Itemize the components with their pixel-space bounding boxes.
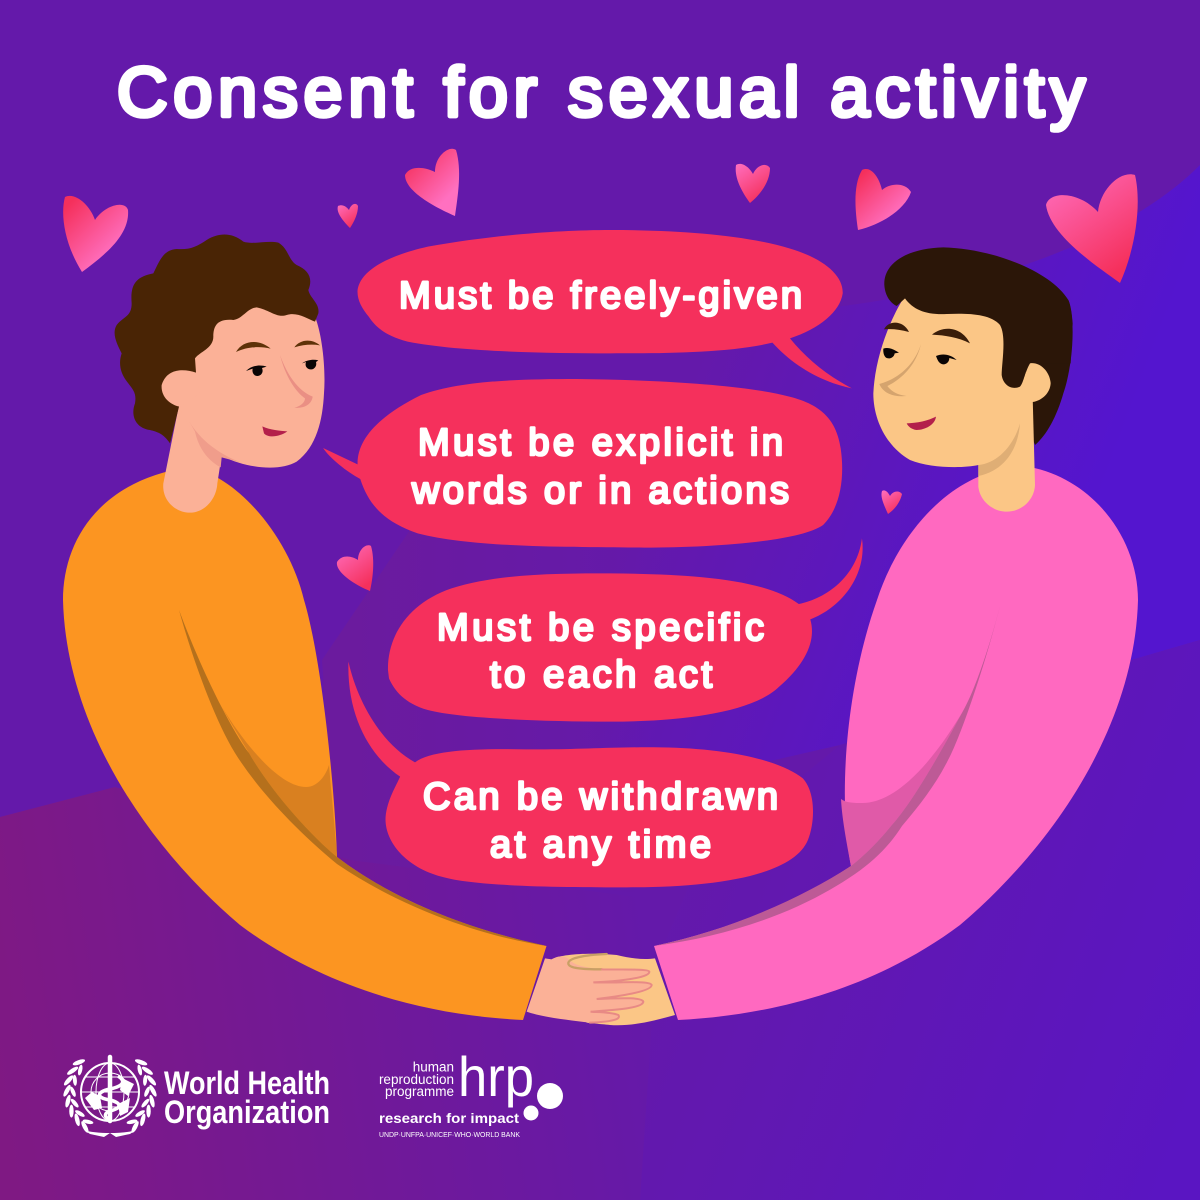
- person left: head: [115, 235, 324, 513]
- speech bubble 1: Must be freely-given: [399, 275, 802, 317]
- mouth: [907, 417, 936, 430]
- heart: upper right: [855, 169, 911, 230]
- logo: HRP: human: [413, 1060, 454, 1074]
- back hair: [1017, 263, 1073, 445]
- speech bubble 2: [323, 379, 842, 548]
- neck: [163, 405, 222, 513]
- ear: [162, 370, 200, 407]
- speech bubble 3: [388, 538, 863, 722]
- speech bubble 4: at any time: [490, 824, 711, 866]
- hands: [527, 954, 675, 1025]
- neck shadow: [978, 423, 1020, 476]
- logo: WHO wordmark: Organization: [164, 1094, 330, 1130]
- speech bubble 2: words or in actions: [411, 470, 789, 512]
- heart: upper centre right: [736, 164, 770, 203]
- hearts: [63, 149, 1138, 591]
- logo: WHO wordmark: World Health: [164, 1065, 330, 1101]
- logo: HRP: hrp: [458, 1045, 534, 1108]
- title: Consent for sexual activity: [117, 53, 1085, 131]
- logo: HRP: reproduction: [379, 1072, 454, 1087]
- nose: [280, 355, 313, 408]
- eyebrows: [236, 341, 320, 352]
- neck shadow: [189, 422, 242, 467]
- face: [873, 297, 1030, 467]
- heart: middle right: [881, 490, 902, 514]
- logo: WHO emblem: [62, 1057, 158, 1137]
- person left: body: [63, 467, 547, 1020]
- speech bubble 4: [348, 662, 813, 887]
- neck: [978, 397, 1035, 512]
- speech bubble 3: to each act: [490, 654, 712, 696]
- speech bubble 4: Can be withdrawn: [423, 776, 778, 818]
- person right: body: [654, 467, 1138, 1020]
- logo: WHO wordmark: [164, 1065, 330, 1130]
- hair: [115, 235, 319, 443]
- ear: [1018, 363, 1051, 402]
- heart: large right: [1046, 174, 1138, 283]
- face: [167, 300, 324, 468]
- eyes: [883, 348, 957, 364]
- heart: small upper left: [338, 204, 358, 228]
- mouth: [262, 426, 287, 436]
- speech bubble 2: Must be explicit in: [418, 422, 783, 464]
- person right: head: [873, 247, 1073, 512]
- logo: HRP: programme: [385, 1084, 454, 1099]
- logo: HRP: research for impact: [379, 1110, 519, 1126]
- eyes: [246, 360, 318, 376]
- heart: far left: [63, 196, 128, 272]
- nose: [879, 344, 921, 396]
- logo: HRP: UNDP·UNFPA·UNICEF·WHO·WORLD BANK: [379, 1132, 520, 1139]
- logo: HRP: [379, 1045, 563, 1139]
- eyebrows: [884, 323, 970, 343]
- speech bubble 1: [358, 230, 852, 388]
- heart: upper centre left: [405, 149, 459, 216]
- speech bubble 3: Must be specific: [437, 607, 764, 649]
- front hair: [884, 247, 1073, 388]
- heart: middle left: [337, 545, 373, 591]
